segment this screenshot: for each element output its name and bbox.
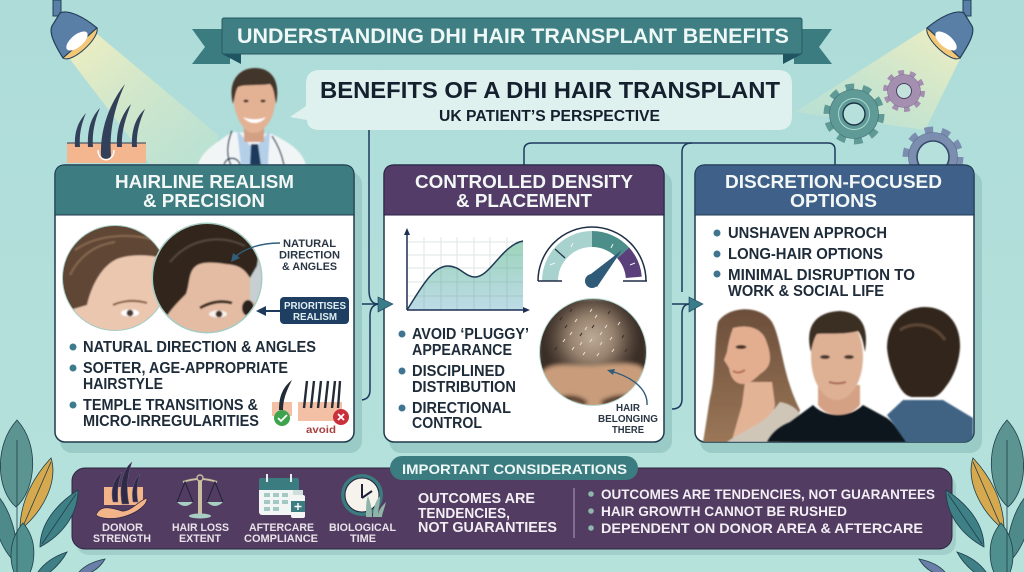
- photo: woman with long hair: [703, 309, 800, 442]
- photo: male hairline: [152, 222, 264, 334]
- bullet list: density: DISTRIBUTION: [412, 379, 516, 396]
- bullet list: discretion: WORK & SOCIAL LIFE: [728, 283, 884, 300]
- text: outcomes summary: [418, 491, 557, 536]
- bullet list: hairline: HAIRSTYLE: [83, 376, 163, 393]
- bullet list: hairline: MICRO-IRREGULARITIES: [83, 413, 259, 430]
- icon: donor strength: STRENGTH: [93, 533, 151, 545]
- doctor portrait: [198, 68, 306, 165]
- decoration: left foliage: [0, 420, 105, 572]
- bullet list: considerations: HAIR GROWTH CANNOT BE RUSHED: [601, 503, 847, 519]
- speech bubble heading: [290, 70, 792, 130]
- chart: density curve: [404, 228, 530, 313]
- callout: natural direction and angles: NATURAL: [283, 238, 336, 250]
- icon: aftercare calendar and bottle: AFTERCARE: [249, 522, 314, 534]
- panel: important considerations: [72, 456, 956, 555]
- panel header: density: CONTROLLED DENSITY: [415, 171, 634, 192]
- icon: biological time clock: [329, 474, 396, 545]
- title banner: UNDERSTANDING DHI HAIR TRANSPLANT BENEFITS: [237, 25, 789, 48]
- bullet list: considerations: [588, 486, 935, 536]
- speech bubble heading: BENEFITS OF A DHI HAIR TRANSPLANT: [320, 77, 781, 103]
- bullet list: discretion: [714, 225, 915, 300]
- icon: right spotlight: [795, 0, 973, 130]
- callout: hair belonging there: THERE: [612, 424, 644, 436]
- bullet list: density: CONTROL: [412, 415, 482, 432]
- panel header: discretion: OPTIONS: [790, 190, 877, 211]
- panel header: hairline: & PRECISION: [143, 190, 265, 211]
- bullet list: hairline: NATURAL DIRECTION & ANGLES: [83, 339, 316, 356]
- icon: aftercare calendar and bottle: [244, 474, 318, 545]
- icon: hair follicle on skin: [67, 84, 146, 163]
- panel: hairline realism and precision: [55, 165, 362, 453]
- icon: avoid pluggy hair: avoid: [306, 425, 336, 436]
- icon: good natural hair: [272, 380, 292, 426]
- bullet list: density: [398, 326, 529, 432]
- bullet list: hairline: TEMPLE TRANSITIONS &: [83, 397, 258, 414]
- arrow: panel one to panel two: [378, 297, 393, 312]
- icon: left spotlight: [51, 0, 218, 164]
- panel: controlled density and placement: [384, 165, 672, 453]
- panel header: discretion: [695, 165, 974, 215]
- panel header: density: & PLACEMENT: [456, 190, 593, 211]
- title banner: [192, 18, 832, 64]
- bullet list: density: APPEARANCE: [412, 342, 512, 359]
- callout: hair belonging there: BELONGING: [598, 413, 658, 425]
- callout: prioritises realism: PRIORITISES: [284, 301, 346, 312]
- photo: man from behind: [887, 307, 973, 445]
- callout: hair belonging there: [598, 369, 658, 436]
- panel: discretion-focused options: [695, 165, 982, 453]
- text: outcomes summary: NOT GUARANTIEES: [418, 520, 557, 536]
- icon: aftercare calendar and bottle: COMPLIANCE: [244, 533, 318, 545]
- icon: purple gear: [886, 72, 922, 110]
- icon: biological time clock: TIME: [350, 533, 376, 545]
- callout: prioritises realism: REALISM: [293, 312, 337, 323]
- gauge: [538, 227, 647, 288]
- decoration: right foliage: [919, 420, 1024, 572]
- icon: teal gear: [827, 87, 881, 141]
- icon: hair loss extent scales: [172, 475, 229, 545]
- callout: natural direction and angles: DIRECTION: [279, 250, 340, 262]
- icon: donor strength: DONOR: [102, 522, 143, 534]
- bullet list: considerations: OUTCOMES ARE TENDENCIES, NOT GUARANTEES: [601, 486, 935, 502]
- icon: donor strength: [93, 462, 151, 545]
- speech bubble heading: UK PATIENT’S PERSPECTIVE: [439, 108, 660, 125]
- bullet list: density: DIRECTIONAL: [412, 400, 511, 417]
- arrow: panel two to panel three: [689, 297, 703, 312]
- icon: hair loss extent scales: HAIR LOSS: [172, 522, 229, 534]
- pill heading: IMPORTANT CONSIDERATIONS: [402, 461, 627, 477]
- bullet list: discretion: MINIMAL DISRUPTION TO: [728, 267, 915, 284]
- bullet list: considerations: DEPENDENT ON DONOR AREA & AFTERCARE: [601, 520, 923, 536]
- panel header: discretion: DISCRETION-FOCUSED: [725, 171, 942, 192]
- icon: avoid pluggy hair: [298, 381, 349, 436]
- icon: biological time clock: BIOLOGICAL: [329, 522, 396, 534]
- bullet list: hairline: [70, 339, 316, 430]
- bullet list: density: DISCIPLINED: [412, 363, 505, 380]
- callout: prioritises realism: [256, 297, 349, 324]
- pill heading: [390, 456, 638, 480]
- panel header: hairline: [55, 165, 354, 215]
- bullet list: discretion: UNSHAVEN APPROCH: [728, 225, 887, 242]
- photo: man facing forward: [767, 311, 910, 442]
- bullet list: hairline: SOFTER, AGE-APPROPRIATE: [83, 360, 288, 377]
- connector lines between panels: [354, 130, 835, 409]
- text: outcomes summary: TENDENCIES,: [418, 506, 510, 522]
- bullet list: density: AVOID ‘PLUGGY’: [412, 326, 529, 343]
- panel header: density: [384, 165, 664, 215]
- callout: natural direction and angles: & ANGLES: [282, 261, 337, 273]
- panel header: hairline: HAIRLINE REALISM: [115, 171, 294, 192]
- text: outcomes summary: OUTCOMES ARE: [418, 491, 535, 507]
- icon: hair loss extent scales: EXTENT: [179, 533, 221, 545]
- callout: natural direction and angles: [231, 238, 340, 273]
- callout: hair belonging there: HAIR: [616, 402, 640, 414]
- photo: thinning crown: [538, 298, 648, 408]
- icon: blue gear: [906, 130, 960, 184]
- photo: female hairline: [62, 225, 160, 331]
- bullet list: discretion: LONG-HAIR OPTIONS: [728, 246, 883, 263]
